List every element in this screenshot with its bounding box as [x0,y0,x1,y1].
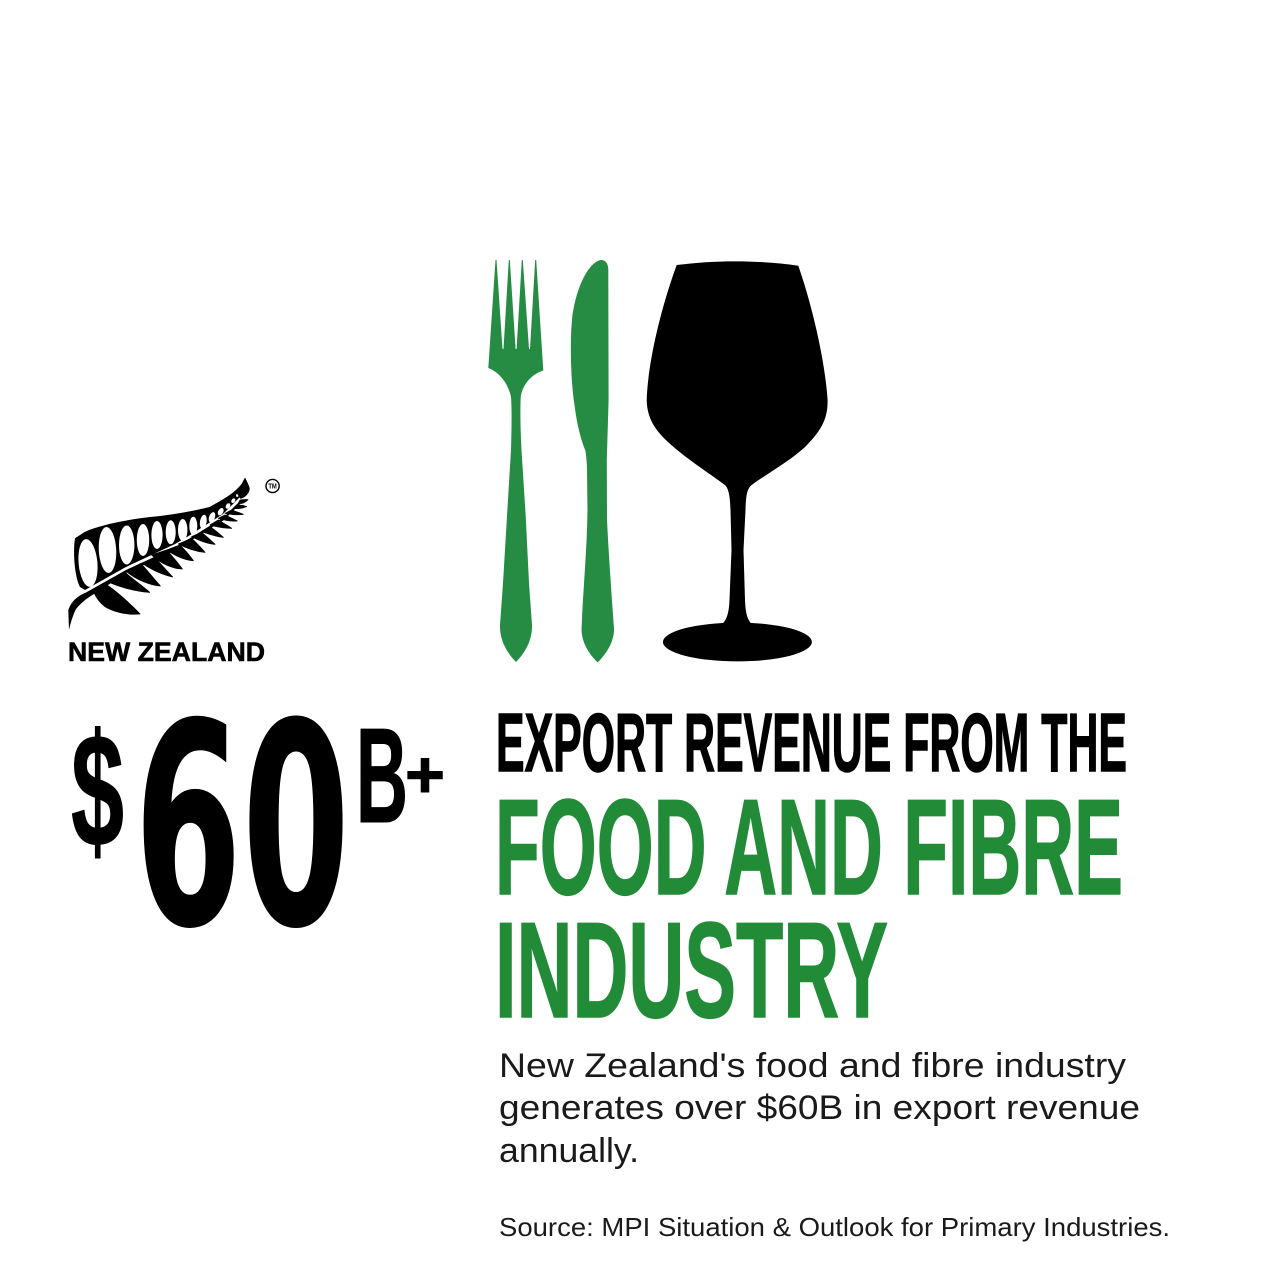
number 60: 60 [134,664,350,991]
fern frond [68,478,249,630]
icon: fork [488,260,543,662]
heading line: industry: INDUSTRY [495,894,888,1046]
big figure: $60B+ [71,664,445,991]
logo: New Zealand fern mark [68,478,279,667]
trademark symbol [266,479,279,493]
body text: New Zealand's food and fibre industry [499,1047,1126,1085]
letter B: B [356,700,408,851]
body text: generates over $60B in export revenue [499,1089,1140,1127]
dollar sign: $ [71,701,124,881]
trademark symbol: TM [268,482,277,491]
icon: wine glass [647,261,828,661]
body text: annually. [499,1132,639,1170]
logo wordmark: NEW ZEALAND [68,637,265,667]
body text [499,1047,1140,1170]
source note: Source: MPI Situation & Outlook for Primary Industries. [499,1212,1170,1242]
plus sign: + [405,737,445,811]
icon: knife [571,260,614,662]
